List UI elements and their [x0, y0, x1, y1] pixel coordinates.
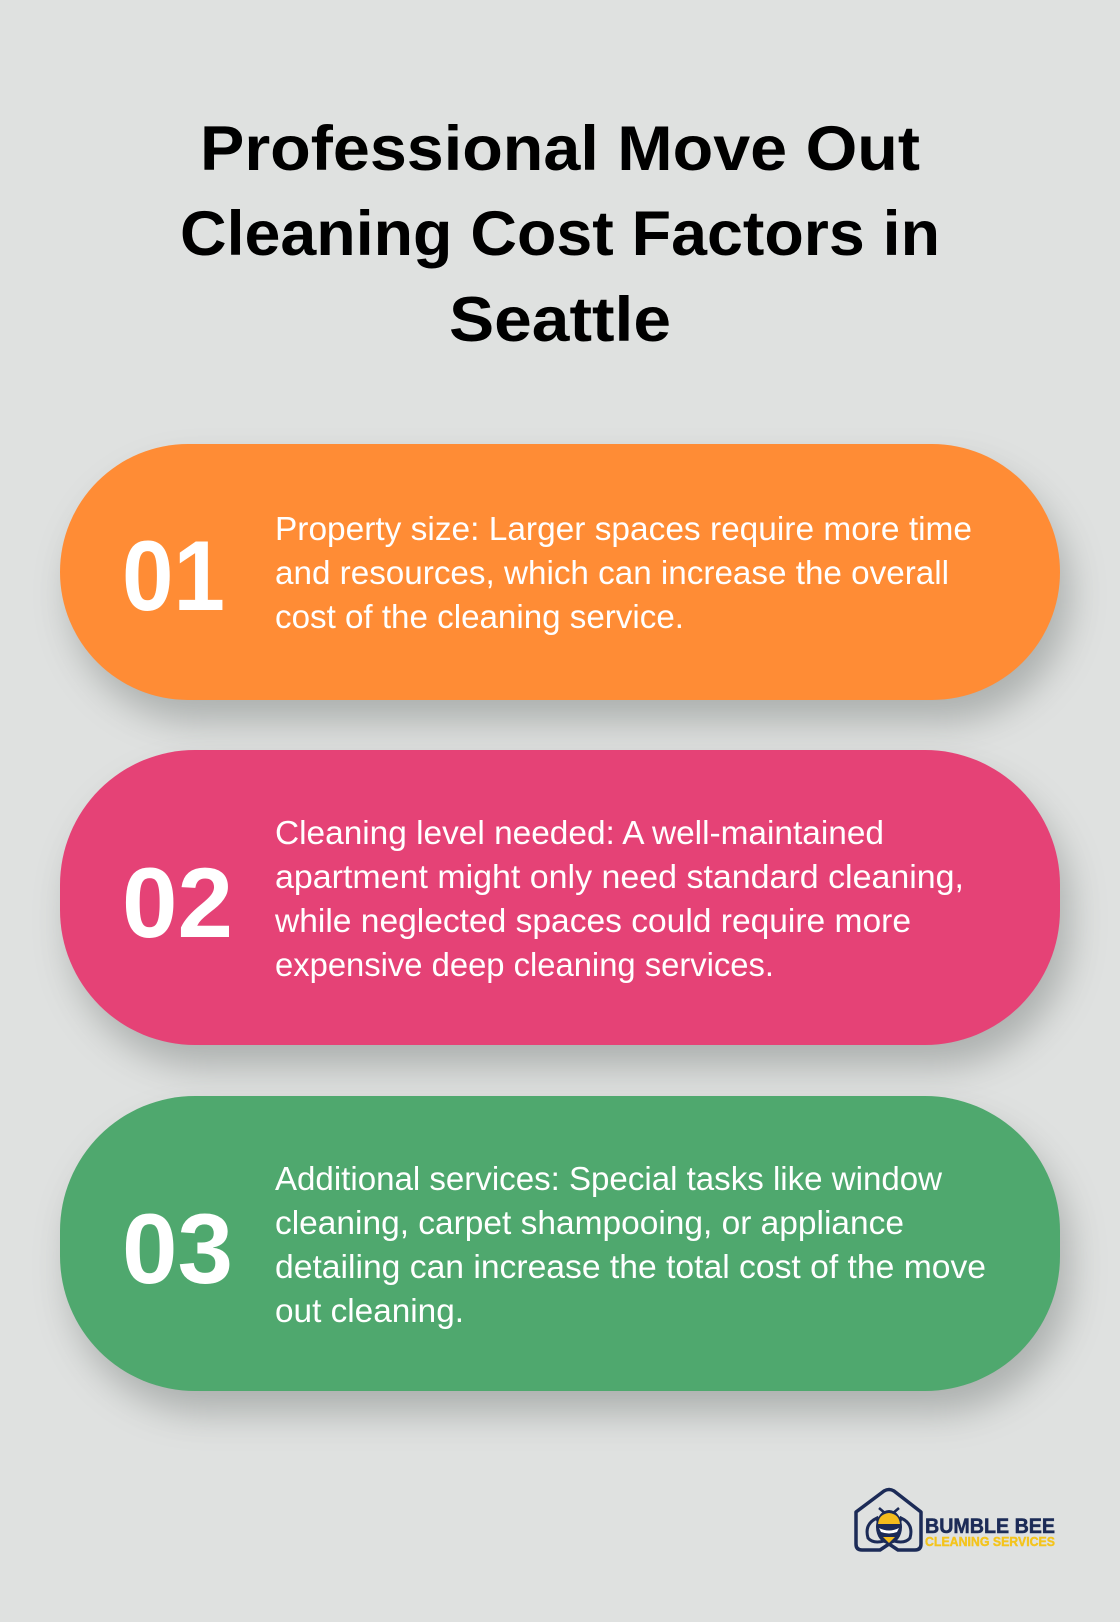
title: [180, 114, 940, 355]
logo text: Bumble Bee: BUMBLE BEE: [925, 1515, 1055, 1538]
logo: [856, 1490, 1055, 1550]
text: property size: [275, 510, 972, 635]
text: cleaning level: Cleaning level needed: A well-maintained: [275, 814, 884, 851]
text: property size: and resources, which can increase the overall: [275, 554, 949, 591]
panel: property size: [60, 444, 1070, 722]
text: additional services: out cleaning.: [275, 1292, 464, 1329]
panel background: orange pill: [60, 444, 1060, 700]
panel: cleaning level: [60, 750, 1070, 1067]
text: cleaning level: expensive deep cleaning services.: [275, 946, 774, 983]
icon: bee in house: [856, 1490, 921, 1550]
text: additional services: cleaning, carpet shampooing, or appliance: [275, 1204, 904, 1241]
number 01: 01: [122, 520, 225, 631]
title: Professional Move Out: [200, 114, 920, 184]
text: additional services: Additional services: Special tasks like window: [275, 1160, 942, 1197]
text: cleaning level: [274, 814, 964, 983]
text: cleaning level: apartment might only need standard cleaning,: [275, 858, 964, 895]
text: property size: cost of the cleaning service.: [275, 598, 684, 635]
panel background: green pill: [60, 1096, 1060, 1391]
logo text: Cleaning Services: CLEANING SERVICES: [925, 1534, 1055, 1549]
number 02: 02: [122, 847, 233, 958]
panel background: pink pill: [60, 750, 1060, 1045]
title: Cleaning Cost Factors in: [180, 199, 940, 269]
number 03: 03: [122, 1193, 233, 1304]
text: additional services: [275, 1160, 986, 1329]
text: cleaning level: while neglected spaces could require more: [274, 902, 911, 939]
text: additional services: detailing can increase the total cost of the move: [275, 1248, 986, 1285]
text: property size: Property size: Larger spaces require more time: [275, 510, 972, 547]
title: Seattle: [449, 285, 671, 355]
panel: additional services: [60, 1096, 1070, 1413]
